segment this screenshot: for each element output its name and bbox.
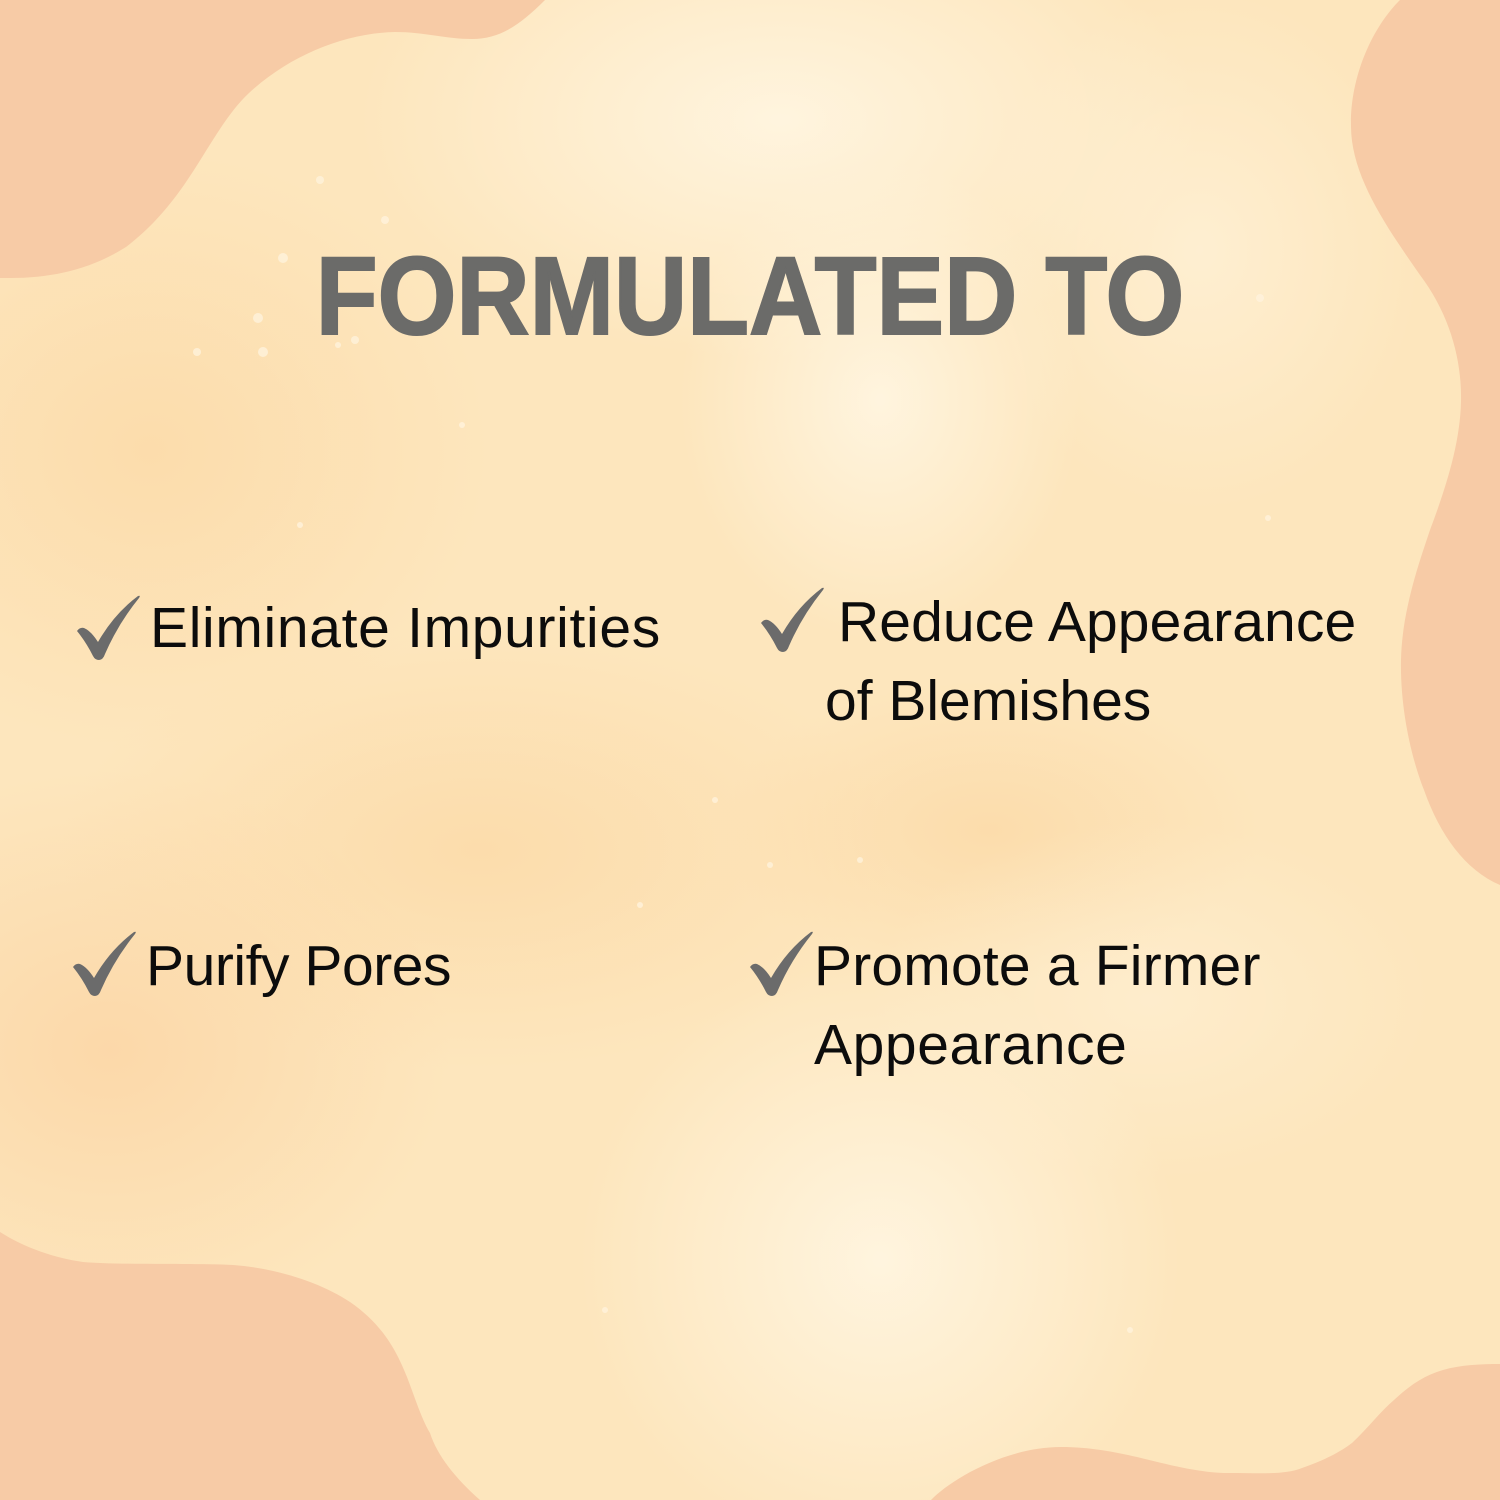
- blob: top left: [0, 0, 545, 278]
- speckles: [193, 176, 1271, 1333]
- blob: bottom right: [931, 1364, 1500, 1500]
- blob: bottom left: [0, 1232, 480, 1500]
- label: Reduce Appearance: [838, 590, 1356, 654]
- blob: right side: [1351, 0, 1500, 885]
- label: Eliminate Impurities: [150, 596, 661, 660]
- icon: check mark: [73, 932, 136, 996]
- benefit: reduce appearance of blemishes: [761, 588, 1356, 733]
- benefit: purify pores: [73, 932, 451, 998]
- icon: check mark: [750, 932, 813, 996]
- title: FORMULATED TO: [316, 235, 1184, 358]
- benefit: promote a firmer appearance: [750, 932, 1261, 1077]
- label: [825, 590, 1356, 733]
- label: Purify Pores: [146, 934, 451, 998]
- benefit: eliminate impurities: [77, 596, 661, 660]
- icon: check mark: [77, 596, 140, 660]
- label: Appearance: [814, 1013, 1127, 1077]
- label: [814, 934, 1261, 1077]
- label: of Blemishes: [825, 669, 1151, 733]
- label: Promote a Firmer: [814, 934, 1261, 998]
- icon: check mark: [761, 588, 824, 652]
